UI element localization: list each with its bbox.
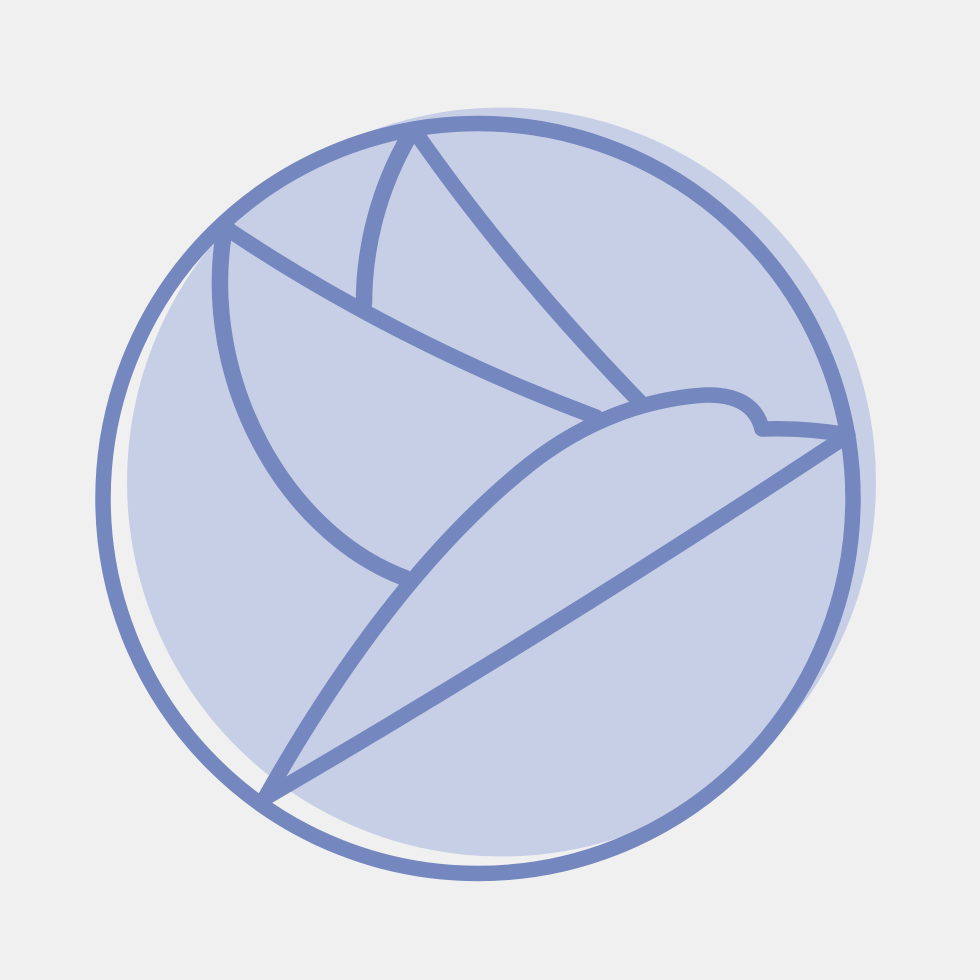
upper wing edge [226,228,596,417]
back wing left edge [364,133,411,303]
outer ring [103,124,853,874]
light offset circle [127,108,876,856]
outline group [103,124,853,874]
back wing right edge [416,133,640,402]
lower wing curve [220,232,405,578]
bird body and head [265,395,848,798]
